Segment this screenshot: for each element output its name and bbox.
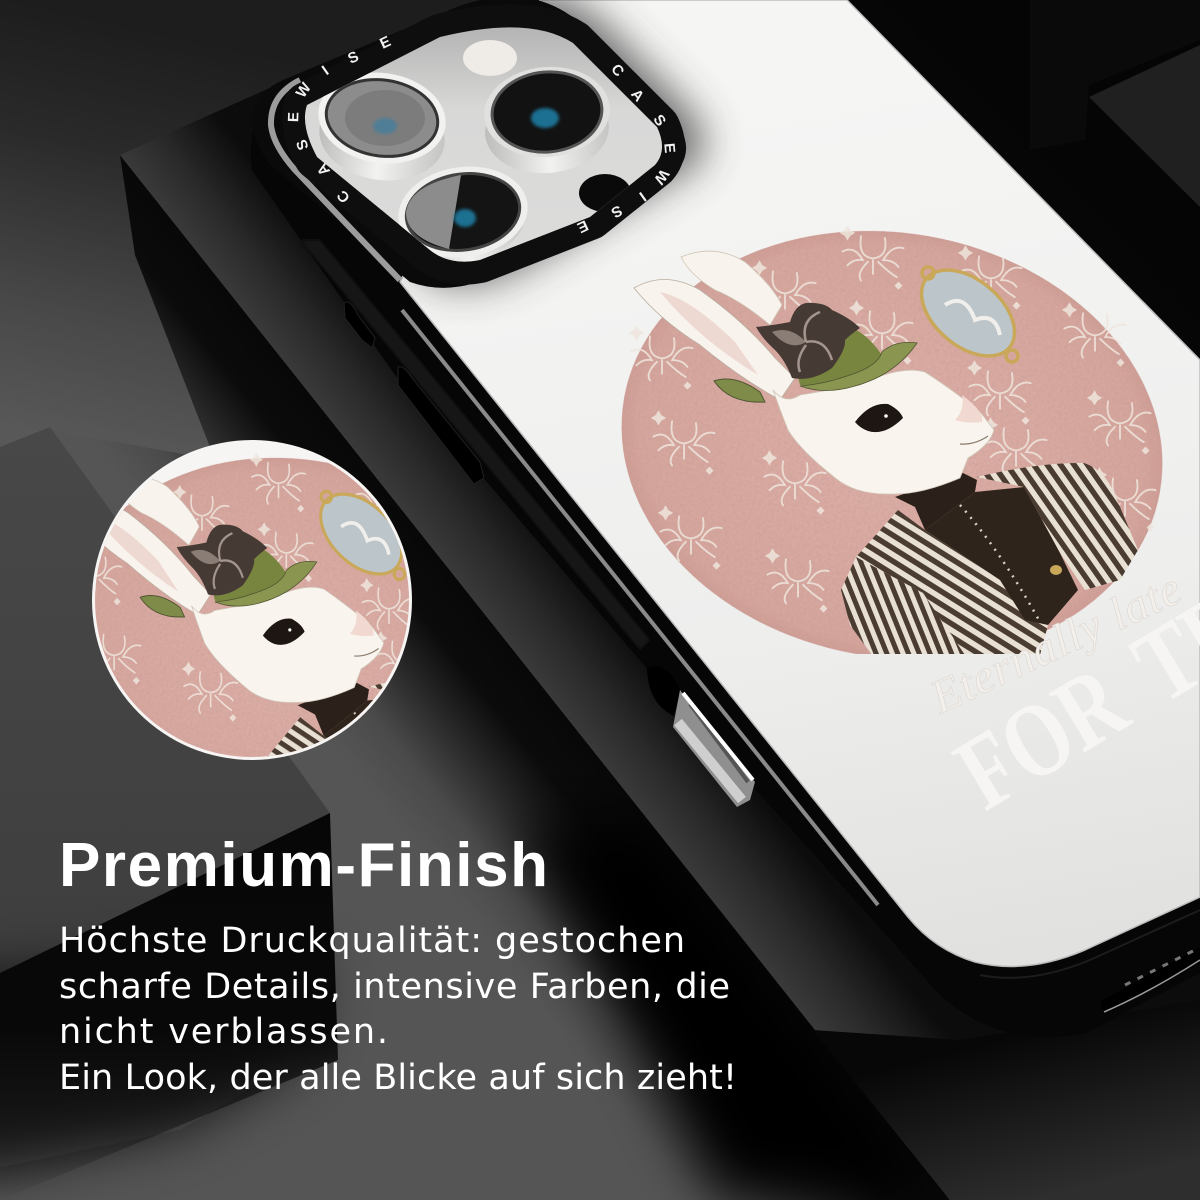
heading: Premium-Finish: [59, 831, 548, 900]
phone body: [251, 0, 1200, 1037]
white back panel: [400, 0, 1200, 966]
hat bow: [756, 303, 860, 379]
body text: nicht verblassen.: [59, 1012, 388, 1052]
gold pendant: [1050, 565, 1062, 575]
front ear: [634, 279, 795, 400]
block: top right: [1089, 45, 1200, 207]
surface below phone: [813, 1000, 1200, 1200]
eye: [855, 404, 903, 432]
side button upper: [344, 302, 375, 348]
charging port: [1104, 950, 1200, 1012]
lidar: [579, 174, 631, 212]
striped jacket right: [977, 463, 1138, 590]
hat brim: [800, 342, 917, 390]
faint slogan small: Eternally late: [922, 562, 1190, 724]
side button middle: [398, 367, 484, 484]
body text: Ein Look, der alle Blicke auf sich zieht!: [59, 1058, 737, 1098]
collar: [895, 473, 977, 530]
body text: scharfe Details, intensive Farben, die: [59, 967, 730, 1007]
mirror: [905, 253, 1031, 373]
floor darkening left: [0, 960, 320, 1180]
glass rim strip: [271, 80, 400, 280]
body text: [59, 921, 737, 1098]
striped jacket left: [856, 510, 1048, 655]
floor shadow along block: [520, 820, 950, 1200]
back ear: [681, 251, 782, 325]
lower block front face: [0, 813, 338, 1200]
body text: Höchste Druckqualität: gestochen: [59, 921, 685, 961]
nose: [955, 395, 982, 423]
lens 1: [318, 72, 446, 180]
hat crown: [790, 327, 885, 386]
lit floor and shadowed side: [0, 155, 950, 1200]
vest buttons: [960, 505, 1040, 622]
lens 2: [485, 67, 610, 173]
rabbit head: [773, 370, 994, 494]
mouth: [960, 436, 988, 444]
pink circle: [587, 189, 1197, 701]
wallpaper ornaments: [630, 226, 1156, 612]
inset border: [92, 440, 412, 760]
brand right: CASEWISE: [575, 61, 678, 236]
frame silver stripe: [402, 310, 878, 905]
block: lower left top surface: [0, 427, 330, 973]
lenses clipped to glass: [312, 40, 631, 270]
inner ear: [660, 292, 758, 375]
brand left: CASEWISE: [285, 33, 394, 206]
island shadow on panel: [400, 0, 730, 312]
green leaf: [714, 379, 765, 402]
island frame: [252, 0, 686, 288]
camera glass and band: [305, 27, 662, 262]
camera island: [252, 0, 686, 288]
white panel bottom frame line: [980, 910, 1200, 978]
striped sleeve: [841, 557, 965, 655]
dark vest: [925, 487, 1078, 625]
side gloss: [300, 240, 650, 650]
inset magnified art: [95, 452, 409, 757]
detail inset circle: [92, 440, 412, 760]
flash: [463, 40, 517, 76]
background top right: [840, 0, 1200, 420]
faint block top right: [1030, 0, 1200, 150]
side button silver: [647, 666, 755, 807]
lens 3: [398, 166, 528, 262]
rabbit illustration: [587, 189, 1197, 701]
